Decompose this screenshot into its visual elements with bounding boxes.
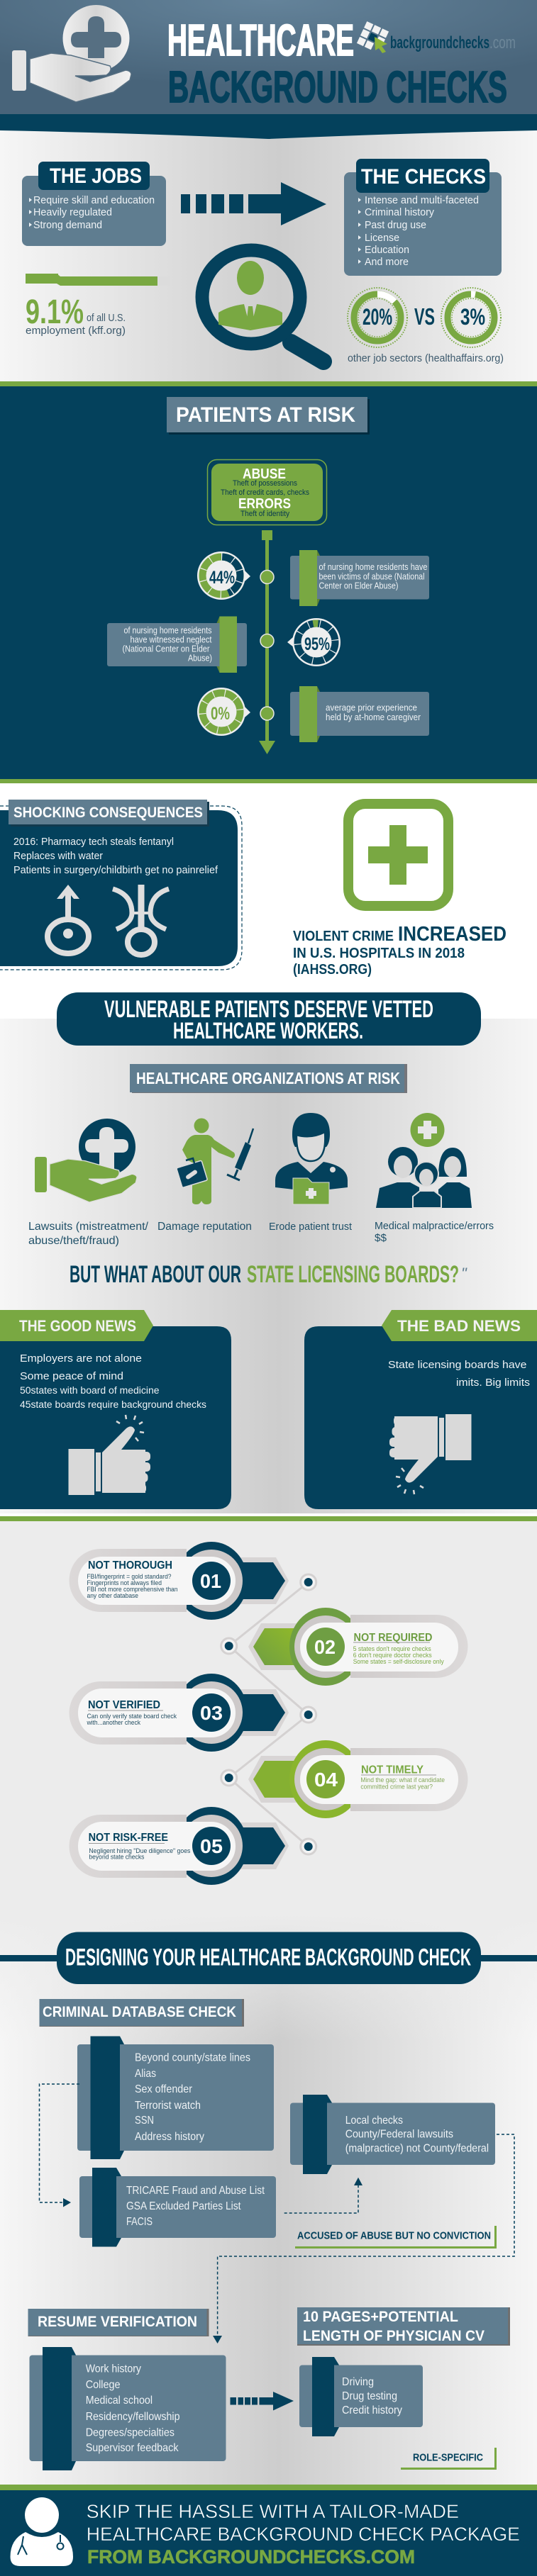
heading: resume verification: [28, 2309, 209, 2336]
icon: family with medical cross: [376, 1113, 472, 1208]
good news list: 50states with board of medicine: [20, 1385, 160, 1396]
card 01: not thorough: [70, 1542, 289, 1620]
bad news text: imits. Big limits: [456, 1377, 530, 1389]
icon: hand holding medical cross: [12, 5, 131, 102]
panel: role-specific checks: Drug testing: [342, 2390, 397, 2402]
good news list: [20, 1353, 206, 1410]
header banner: [0, 0, 537, 139]
tag: the good news: [0, 1310, 153, 1341]
card 01: not thorough: any other database: [87, 1592, 138, 1600]
checks list: Education: [365, 244, 409, 256]
consequences list: Patients in surgery/childbirth get no painrelief: [13, 864, 218, 876]
stat: violent crime increased: (IAHSS.ORG): [293, 962, 372, 978]
heading: the checks: [356, 159, 489, 193]
card 01: not thorough: 01: [200, 1570, 221, 1592]
call to action text: FROM BACKGROUNDCHECKS.COM: [87, 2546, 415, 2567]
section: patients at risk: [0, 381, 537, 783]
stat: violent crime increased: INCREASED: [398, 923, 506, 946]
card 03: not verified: NOT VERIFIED: [88, 1699, 160, 1711]
stat box: abuse victims: [290, 550, 429, 606]
banner: vulnerable patients: HEALTHCARE WORKERS.: [173, 1018, 363, 1043]
card 01: not thorough: FBI/fingerprint = gold standard?: [87, 1573, 172, 1581]
heading: state licensing boards question: ": [461, 1265, 467, 1282]
icon: magnifier with person: [202, 250, 323, 362]
card 01: not thorough: FBI not more comprehensive than: [87, 1586, 177, 1594]
panel: exclusion lists: [79, 2168, 276, 2247]
consequences list: Replaces with water: [13, 850, 103, 862]
good news list: 45state boards require background checks: [20, 1399, 206, 1410]
labels: organization risks: Lawsuits (mistreatment/: [28, 1221, 149, 1233]
panel: local checks: [290, 2095, 495, 2174]
good news list: Employers are not alone: [20, 1353, 142, 1365]
card 05: not risk-free: [70, 1807, 289, 1885]
checks list: Criminal history: [365, 206, 434, 218]
panel: database list: Alias: [135, 2068, 156, 2080]
callout: role-specific: [401, 2448, 495, 2468]
card 02: not required: 02: [314, 1636, 336, 1658]
stat: violent crime increased: [293, 923, 506, 978]
jobs list: [29, 194, 155, 231]
call to action text: SKIP THE HASSLE WITH A TAILOR-MADE: [87, 2501, 459, 2522]
card 05: not risk-free: beyond state checks: [89, 1853, 145, 1861]
heading: the jobs: THE JOBS: [50, 164, 142, 188]
gauge: 95 percent: 95%: [304, 634, 330, 654]
panel: resume list: Medical school: [86, 2395, 153, 2407]
call to action text: HEALTHCARE BACKGROUND CHECK PACKAGE: [87, 2524, 520, 2545]
donut: 20 percent: 20%: [362, 304, 392, 330]
banner: designing your healthcare background check: [0, 1932, 537, 1984]
labels: organization risks: abuse/theft/fraud): [28, 1235, 119, 1247]
card 04: not timely: NOT TIMELY: [361, 1764, 423, 1776]
panel: database list: Terrorist watch: [135, 2100, 201, 2112]
card 05: not risk-free: Negligent hiring "Due diligence" goes: [89, 1847, 191, 1855]
panel: database list: [77, 2036, 274, 2159]
icon: person with syringe: [177, 1119, 253, 1204]
stat box: abuse victims: been victims of abuse (National: [319, 571, 424, 581]
panel: database list: Sex offender: [135, 2083, 193, 2095]
stat box: prior experience: average prior experience: [326, 702, 417, 713]
card 02: not required: NOT REQUIRED: [353, 1632, 433, 1644]
heading: physician cv length: LENGTH OF PHYSICIAN CV: [303, 2328, 485, 2344]
card 02: not required: Some states = self-disclosure only: [353, 1658, 444, 1666]
card 05: not risk-free: NOT RISK-FREE: [89, 1832, 168, 1844]
tag: the bad news: THE BAD NEWS: [397, 1317, 521, 1335]
icon: doctor silhouette: [10, 2497, 73, 2566]
panel: exclusion lists: GSA Excluded Parties List: [126, 2200, 241, 2212]
panel: database list: Beyond county/state lines: [135, 2051, 250, 2064]
card 04: not timely: committed crime last year?: [360, 1783, 433, 1791]
title: healthcare: HEALTHCARE: [167, 16, 354, 65]
panel: the bad news: [304, 1310, 537, 1509]
panel: the checks: [344, 159, 502, 276]
panel: the jobs: [22, 162, 166, 246]
connector: timeline nodes: [221, 1574, 316, 1854]
stat box: witnessed neglect: (National Center on Elder: [122, 644, 210, 654]
icon: thumbs up: [68, 1415, 150, 1495]
panel: exclusion lists: TRICARE Fraud and Abuse List: [126, 2185, 265, 2197]
card 05: not risk-free: 05: [200, 1835, 223, 1857]
donut: 3 percent: [441, 288, 501, 347]
callout: abuse and errors: Theft of credit cards, checks: [221, 488, 309, 497]
caption: other job sectors: other job sectors (healthaffairs.org): [348, 352, 504, 364]
card 02: not required: [248, 1608, 468, 1686]
icon: alchemical symbol: [113, 885, 169, 955]
stat: 9.1 percent: [26, 293, 126, 337]
tag: the good news: THE GOOD NEWS: [19, 1317, 136, 1335]
panel: resume list: Residency/fellowship: [86, 2411, 180, 2423]
stat box: abuse victims: of nursing home residents have: [319, 562, 428, 572]
heading: physician cv length: 10 PAGES+POTENTIAL: [303, 2309, 458, 2325]
header navy band: [0, 114, 537, 139]
card 03: not verified: with...another check: [87, 1719, 140, 1727]
arrow: exclusion lists to local checks: [284, 2178, 362, 2213]
heading: resume verification: RESUME VERIFICATION: [38, 2314, 197, 2330]
stat: 9.1 percent: of all U.S.: [87, 312, 126, 324]
labels: organization risks: Medical malpractice/errors: [375, 1220, 494, 1232]
checks list: License: [365, 232, 399, 244]
icon: green hand with cross: [35, 1119, 137, 1202]
text: versus: VS: [414, 303, 435, 330]
heading: healthcare organizations at risk: [130, 1064, 407, 1093]
checks list: [358, 194, 479, 268]
icon: uranus symbol: [48, 885, 89, 953]
arrow: jobs to checks: [181, 182, 326, 225]
bad news text: State licensing boards have: [388, 1359, 526, 1371]
heading: patients at risk: PATIENTS AT RISK: [176, 403, 355, 427]
labels: organization risks: Damage reputation: [157, 1221, 252, 1233]
card 01: not thorough: Fingerprints not always filed: [87, 1579, 162, 1587]
jobs list: Require skill and education: [33, 194, 155, 206]
panel: shocking consequences: [0, 800, 242, 970]
labels: organization risks: [28, 1220, 494, 1247]
panel: resume list: Degrees/specialties: [86, 2427, 175, 2438]
bad news text: [388, 1359, 530, 1389]
logo: backgroundchecks.com: [357, 21, 516, 53]
panel: role-specific checks: Credit history: [342, 2404, 402, 2417]
checks list: Past drug use: [365, 219, 426, 231]
card 03: not verified: 03: [200, 1702, 223, 1724]
arrow: local checks to resume verification: [213, 2134, 514, 2343]
panel: the good news: [0, 1310, 231, 1509]
callout: abuse and errors: [207, 459, 326, 525]
timeline arrow: [259, 530, 275, 754]
bar: share of employment: [26, 274, 170, 286]
tag: the bad news: [382, 1310, 537, 1341]
jobs list: Heavily regulated: [33, 206, 112, 218]
divider: green rule: [0, 1516, 537, 1521]
banner: vulnerable patients: [57, 992, 481, 1046]
stat box: witnessed neglect: [107, 617, 247, 673]
icon: green medical plus: [348, 804, 448, 906]
icon: thumbs down: [389, 1414, 471, 1494]
labels: organization risks: $$: [375, 1232, 387, 1244]
gauge: 0 percent: [197, 688, 250, 736]
panel: resume list: Supervisor feedback: [86, 2442, 179, 2454]
card 01: not thorough: NOT THOROUGH: [88, 1559, 172, 1572]
gauge: 0 percent: 0%: [211, 704, 230, 724]
stat box: prior experience: held by at-home caregiver: [326, 712, 421, 722]
gauge: 44 percent: [197, 551, 250, 600]
gauge: 95 percent: [287, 618, 341, 666]
callout: abuse and errors: ABUSE: [243, 466, 286, 482]
panel: resume list: College: [86, 2379, 121, 2391]
callout: role-specific: ROLE-SPECIFIC: [413, 2451, 483, 2464]
panel: database list: Address history: [135, 2131, 204, 2143]
heading: shocking consequences: [9, 800, 209, 827]
consequences list: [13, 836, 218, 876]
panel: role-specific checks: Driving: [342, 2376, 374, 2388]
heading: criminal database check: [40, 1999, 244, 2027]
heading: healthcare organizations at risk: HEALTHCARE ORGANIZATIONS AT RISK: [136, 1069, 400, 1087]
stat: 9.1 percent: employment (kff.org): [26, 325, 126, 337]
panel: role-specific checks: [299, 2357, 423, 2436]
checks list: And more: [365, 256, 409, 268]
heading: the checks: THE CHECKS: [361, 165, 486, 189]
stat box: witnessed neglect: have witnessed neglect: [131, 635, 212, 645]
jobs list: Strong demand: [33, 219, 102, 231]
panel: exclusion lists: FACIS: [126, 2216, 153, 2228]
stat: violent crime increased: VIOLENT CRIME: [293, 929, 394, 944]
callout: abuse and errors: ERRORS: [238, 496, 291, 512]
callout: accused of abuse: [295, 2226, 495, 2247]
stat box: witnessed neglect: Abuse): [188, 654, 212, 663]
heading: criminal database check: CRIMINAL DATABASE CHECK: [43, 2004, 236, 2020]
heading: state licensing boards question: BUT WHAT ABOUT OUR: [70, 1261, 241, 1288]
call to action text: [87, 2501, 520, 2567]
arrow: database to exclusion lists: [40, 2084, 79, 2207]
icon: doctor with folder: [275, 1113, 348, 1204]
arrow: resume to role-specific: [230, 2392, 294, 2410]
card 03: not verified: [70, 1674, 289, 1752]
panel: local checks: County/Federal lawsuits: [345, 2129, 453, 2141]
panel: local checks: Local checks: [345, 2115, 403, 2127]
stat box: witnessed neglect: of nursing home residents: [123, 625, 211, 635]
card 02: not required: 5 states don't require checks: [353, 1645, 431, 1653]
callout: accused of abuse: ACCUSED OF ABUSE BUT NO CONVICTION: [297, 2230, 491, 2242]
donut: 3 percent: 3%: [460, 304, 485, 330]
good news list: Some peace of mind: [20, 1370, 123, 1382]
stat box: abuse victims: Center on Elder Abuse): [319, 581, 399, 591]
heading: shocking consequences: SHOCKING CONSEQUENCES: [13, 805, 203, 821]
gauge: 44 percent: 44%: [209, 568, 235, 588]
callout: abuse and errors: Theft of possessions: [233, 479, 297, 488]
heading: patients at risk: [167, 397, 370, 435]
heading: physician cv length: [297, 2307, 510, 2346]
panel: database list: SSN: [135, 2115, 154, 2127]
panel: resume list: Work history: [86, 2363, 141, 2375]
donut: 20 percent: [348, 288, 407, 347]
card 04: not timely: 04: [314, 1769, 338, 1791]
logo: backgroundchecks.com: .com: [489, 33, 516, 52]
stat box: prior experience: [290, 686, 429, 742]
stat: violent crime increased: IN U.S. HOSPITALS IN 2018: [293, 946, 465, 961]
consequences list: 2016: Pharmacy tech steals fentanyl: [13, 836, 174, 848]
checks list: Intense and multi-faceted: [365, 194, 479, 206]
stat: 9.1 percent: 9.1%: [26, 293, 84, 331]
card 02: not required: 6 don't require doctor checks: [353, 1652, 432, 1659]
card 04: not timely: Mind the gap: what if candidate: [360, 1776, 445, 1784]
card 03: not verified: Can only verify state board check: [87, 1713, 177, 1720]
labels: organization risks: Erode patient trust: [269, 1221, 353, 1233]
card 04: not timely: [248, 1740, 468, 1818]
panel: local checks: (malpractice) not County/federal: [345, 2143, 489, 2155]
footer banner: [0, 2485, 537, 2576]
panel: resume list: [30, 2347, 226, 2470]
callout: abuse and errors: Theft of identity: [240, 510, 289, 518]
